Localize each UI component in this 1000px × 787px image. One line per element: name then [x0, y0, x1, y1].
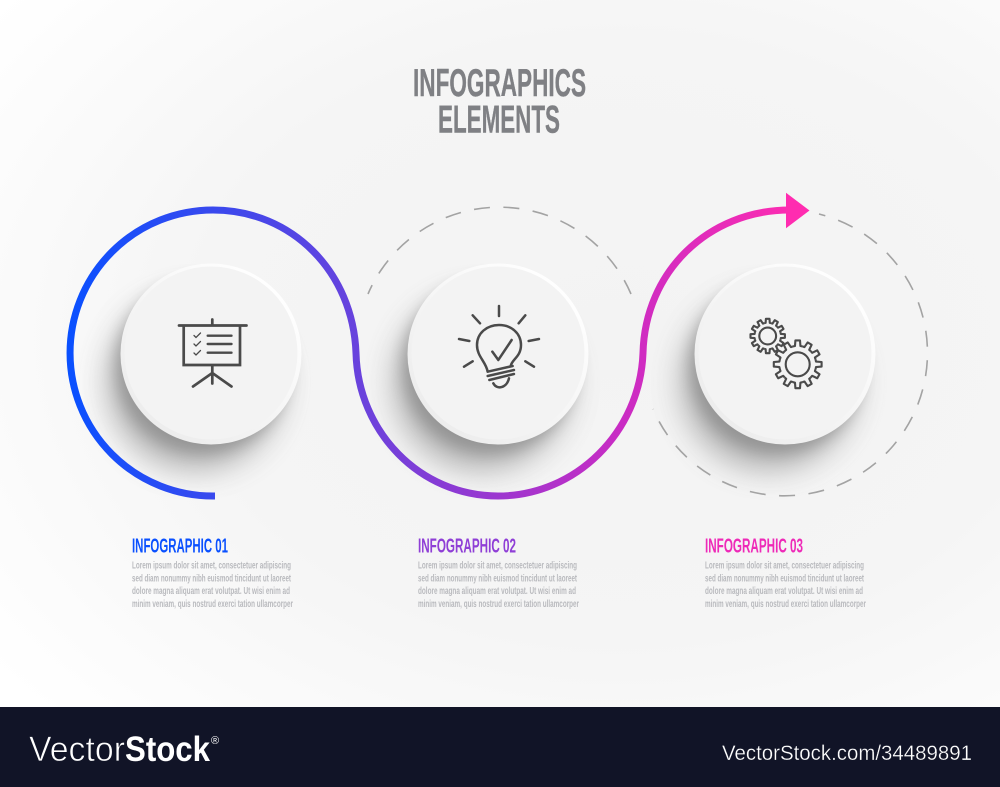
text block: infographic 01: dolore magna aliquam erat volutpat. Ut wisi enim ad: [132, 586, 290, 597]
footer logo: [29, 730, 219, 769]
shadow: circle 02: [394, 278, 578, 470]
shadow: circle 03: [681, 278, 865, 470]
footer bar: [0, 707, 1000, 787]
icon: light bulb with check: [459, 306, 539, 387]
dashed arc: above circle 02: [368, 207, 631, 294]
text block: infographic 03: minim veniam, quis nostrud exerci tation ullamcorper: [705, 599, 866, 610]
text block: infographic 02: dolore magna aliquam erat volutpat. Ut wisi enim ad: [418, 586, 576, 597]
footer url: VectorStock.com/34489891: [722, 742, 972, 765]
text block: infographic 01: minim veniam, quis nostrud exerci tation ullamcorper: [132, 599, 293, 610]
text block: infographic 01: Lorem ipsum dolor sit amet, consectetuer adipiscing: [132, 560, 291, 572]
text block: infographic 02: sed diam nonummy nibh euismod tincidunt ut laoreet: [418, 573, 577, 584]
text block: infographic 01: [132, 536, 293, 610]
panel: circle 03: [694, 264, 876, 444]
text block: infographic 03: sed diam nonummy nibh euismod tincidunt ut laoreet: [705, 573, 864, 584]
gradient timeline path: [70, 210, 790, 496]
dashed arc: around circle 03: [653, 214, 927, 496]
text block: infographic 03: Lorem ipsum dolor sit amet, consectetuer adipiscing: [705, 560, 864, 572]
title: INFOGRAPHICS: [413, 62, 586, 105]
footer logo: Vector: [29, 730, 125, 769]
text block: infographic 03: dolore magna aliquam erat volutpat. Ut wisi enim ad: [705, 586, 863, 597]
text block: infographic 02: Lorem ipsum dolor sit amet, consectetuer adipiscing: [418, 560, 577, 572]
text block: infographic 01: INFOGRAPHIC 01: [132, 536, 228, 558]
panel: circle 01: [120, 264, 302, 444]
title: ELEMENTS: [438, 98, 560, 142]
title: [413, 62, 586, 142]
text block: infographic 02: INFOGRAPHIC 02: [418, 536, 516, 558]
footer logo: ®: [211, 735, 219, 747]
text block: infographic 01: sed diam nonummy nibh euismod tincidunt ut laoreet: [132, 573, 291, 584]
text block: infographic 03: INFOGRAPHIC 03: [705, 536, 803, 558]
text block: infographic 02: [418, 536, 579, 610]
icon: presentation board: [179, 320, 246, 386]
panel: circle 02: [408, 264, 588, 444]
icon: gears: [750, 319, 822, 388]
footer logo: Stock: [125, 730, 210, 769]
text block: infographic 03: [705, 536, 866, 610]
shadow: circle 01: [107, 278, 291, 470]
arrow head: [786, 193, 810, 228]
text block: infographic 02: minim veniam, quis nostrud exerci tation ullamcorper: [418, 599, 579, 610]
